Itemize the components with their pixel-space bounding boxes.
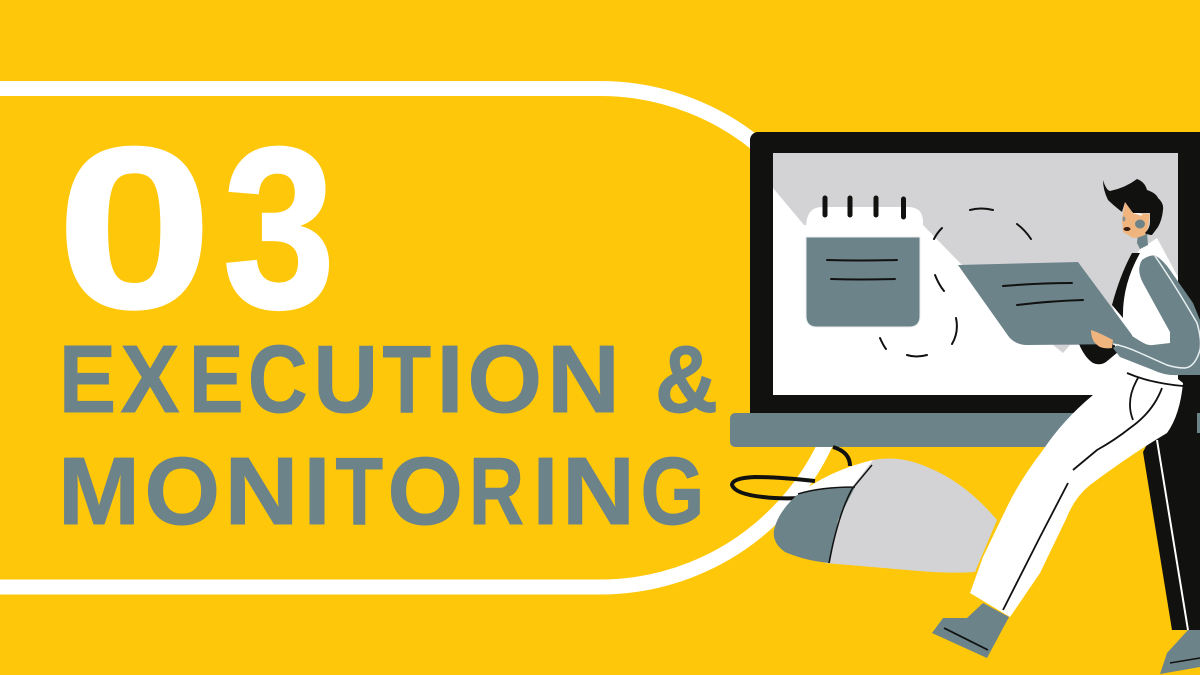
heading: execution & monitoring: I [533,438,558,545]
eye highlight [1132,212,1142,215]
back shoe [1160,630,1200,674]
black bag [1079,344,1117,364]
heading: execution & monitoring: G [640,438,704,545]
mouse cable [732,447,850,498]
number 03: 3 [223,100,335,356]
heading: execution & monitoring: E [189,326,244,433]
mouth [1124,227,1130,231]
heading: execution & monitoring: O [144,438,220,545]
heading: execution & monitoring: M [58,438,140,545]
worker figure [932,179,1200,674]
heading: execution & monitoring: C [248,326,308,433]
heading: execution & monitoring: O [388,438,463,545]
heading: execution & monitoring: T [336,438,383,545]
left cheek mark [1122,216,1126,222]
sleeve [1113,256,1200,375]
white vest [1112,238,1178,350]
black shirt [1112,253,1140,318]
heading: execution & monitoring: E [59,326,116,433]
face [1122,202,1150,238]
dashed circle arrows [880,208,1031,356]
mouse [774,459,997,573]
number 03: 0 [57,100,212,356]
cheek [1135,220,1145,228]
heading: execution & monitoring: I [436,326,464,433]
heading: execution & monitoring: N [562,438,635,545]
heading: execution & monitoring: & [655,326,718,433]
screen [773,153,1178,395]
heading: execution & monitoring: O [468,326,542,433]
icon: calendar [806,198,923,327]
heading: execution & monitoring: N [547,326,620,433]
hair [1103,179,1163,235]
ear [1150,215,1153,224]
heading: execution & monitoring: N [224,438,298,545]
heading: execution & monitoring [58,326,718,545]
heading: execution & monitoring: U [314,326,378,433]
heading: execution & monitoring: X [120,326,180,433]
tablet [958,262,1134,345]
illustration: monitor and worker [730,132,1200,674]
neck [1137,233,1148,249]
heading: execution & monitoring: R [469,438,524,545]
heading: execution & monitoring: T [382,326,431,433]
monitor stand [730,413,1090,447]
front leg [970,379,1183,617]
monitor [730,132,1200,447]
front shoe [932,603,1009,658]
hand [1091,330,1113,348]
heading: execution & monitoring: I [304,438,330,545]
rounded title outline [0,88,849,587]
back leg [1143,432,1200,630]
